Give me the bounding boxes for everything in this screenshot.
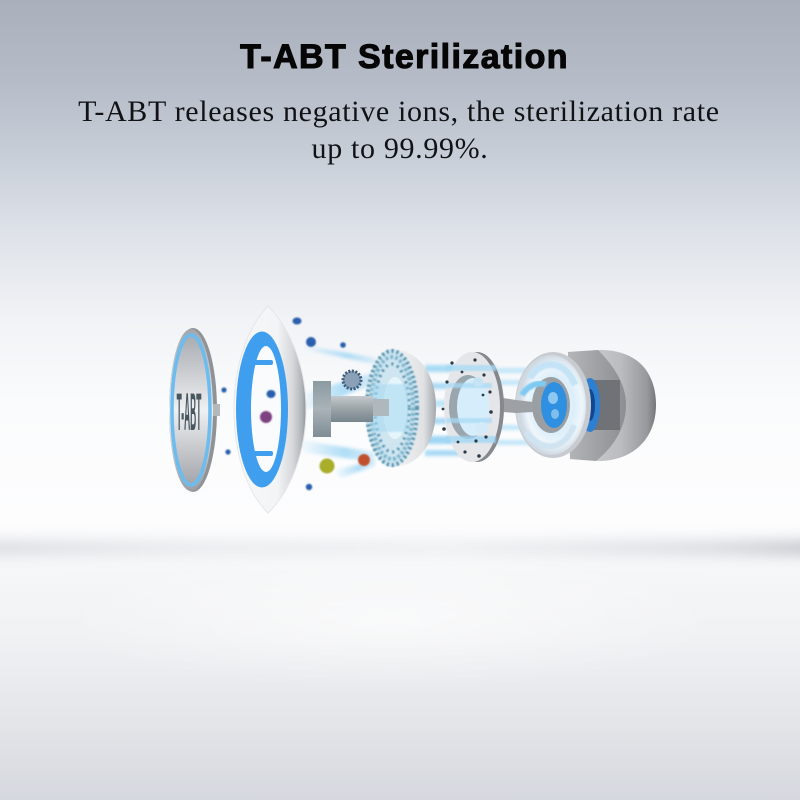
germ: purple	[260, 411, 272, 423]
title: T-ABT Sterilization	[240, 38, 569, 76]
component: connector shaft	[503, 398, 533, 413]
component: glowing blue fan wheel	[515, 352, 591, 458]
component: perforated ring disc	[442, 352, 504, 462]
component: rear housing	[568, 350, 656, 461]
germ: yellow-green	[320, 458, 334, 474]
component: T-ABT logo disc: T-ABT	[177, 383, 201, 441]
description text: up to 99.99%.	[312, 132, 488, 165]
particles: ions and germs	[221, 318, 370, 490]
component: bracket and shaft	[313, 381, 389, 437]
component: T-ABT logo disc	[169, 328, 220, 492]
illustration: T-ABT sterilization module exploded view	[169, 306, 656, 513]
germ: dark blue cluster	[343, 371, 361, 389]
component: filter mesh disc	[365, 349, 436, 467]
component: front ring cover	[234, 306, 306, 513]
description text: T-ABT releases negative ions, the sterilization rate	[78, 95, 720, 128]
airflow beams	[300, 345, 535, 478]
germ: orange	[358, 454, 370, 466]
